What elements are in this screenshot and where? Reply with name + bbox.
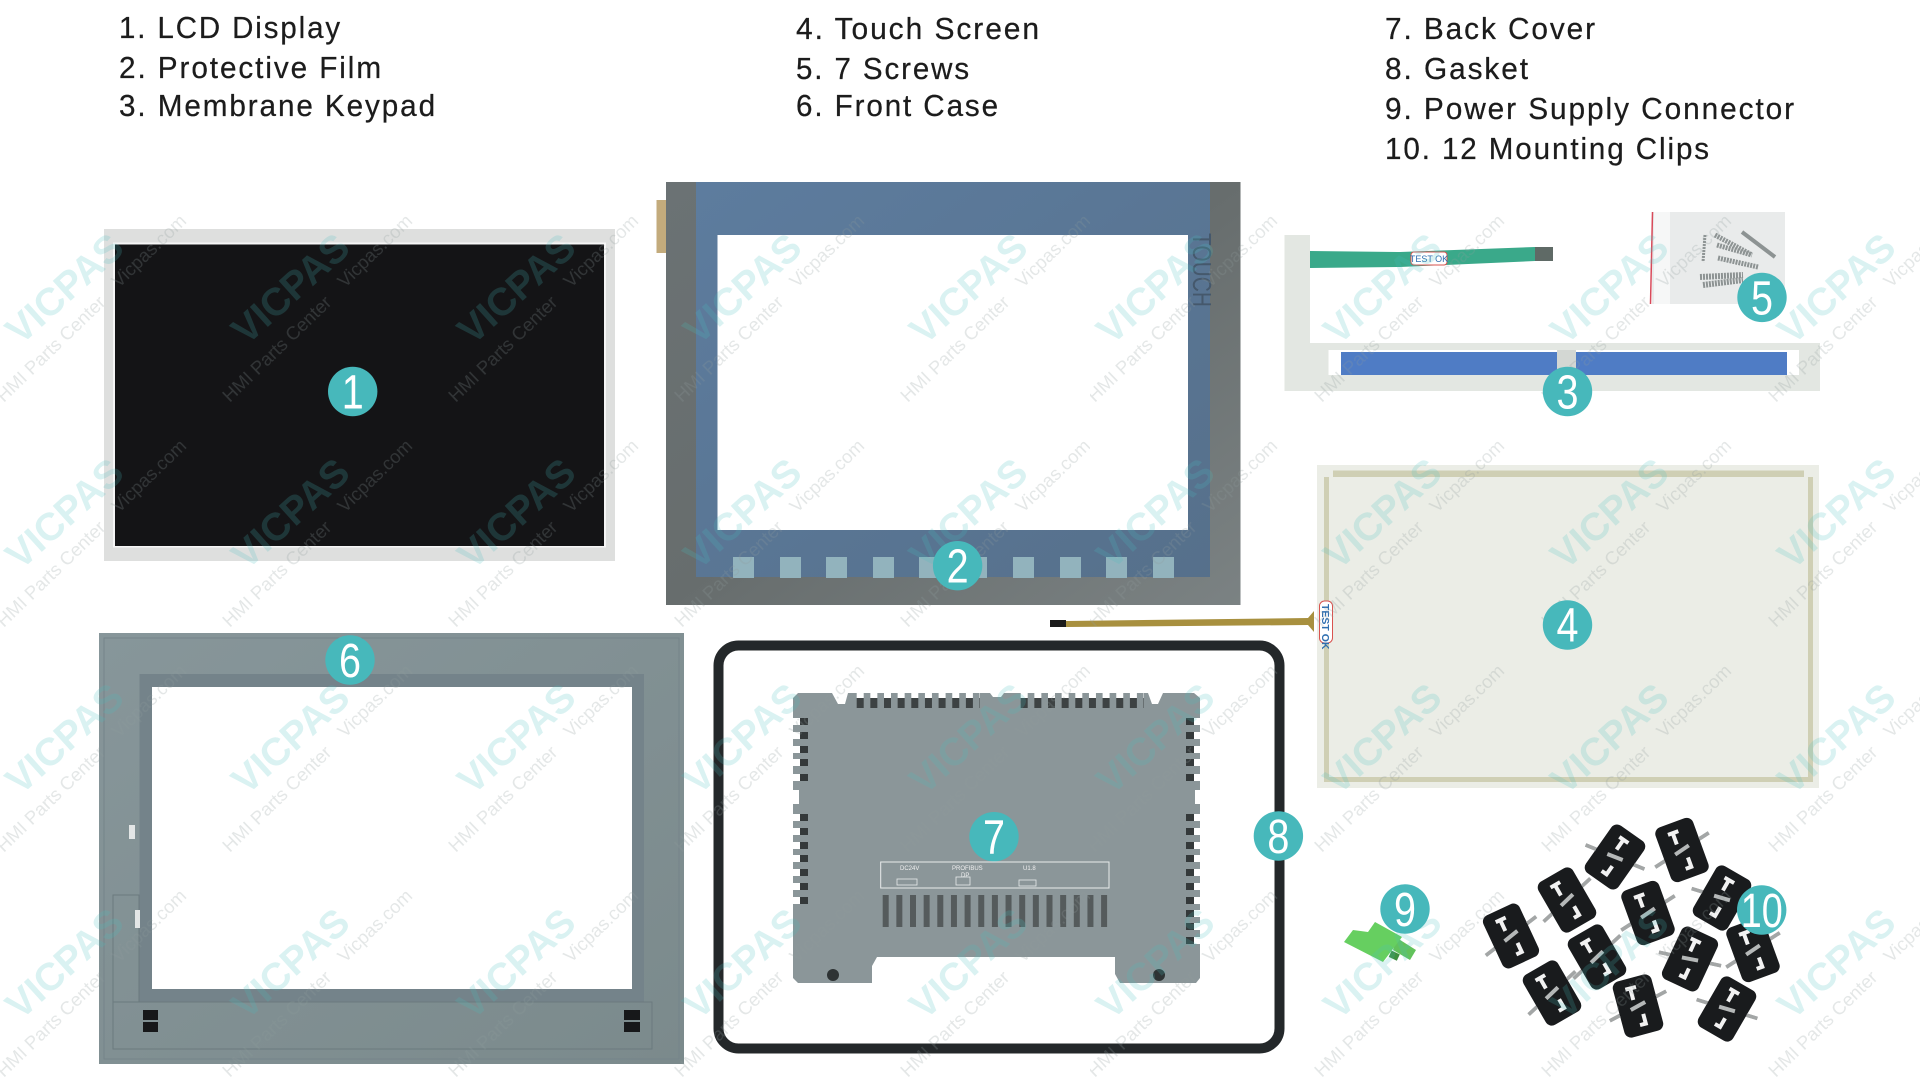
- badge 6: [325, 635, 375, 688]
- parts list: column 2: [796, 11, 1041, 123]
- parts list: column 1: 3. Membrane Keypad: [119, 88, 437, 123]
- connector label box: DP: [961, 873, 969, 879]
- badge 8: [1254, 811, 1303, 864]
- parts list: column 3: 7. Back Cover: [1385, 11, 1597, 46]
- back cover vents: [857, 696, 1144, 911]
- test ok sticker: TEST OK: [1319, 604, 1331, 650]
- badge 8: 8: [1267, 811, 1289, 864]
- part 1: LCD display: [104, 229, 615, 561]
- parts list: column 2: 6. Front Case: [796, 88, 1000, 123]
- connector label box: [881, 862, 1109, 888]
- parts list: column 3: 8. Gasket: [1385, 51, 1530, 86]
- badge 9: [1380, 884, 1430, 937]
- connector label box: DC24V: [900, 866, 919, 872]
- parts list: column 1: 1. LCD Display: [119, 10, 342, 45]
- function keys: [733, 557, 1174, 578]
- connector label box: PROFIBUS: [952, 866, 983, 872]
- part 4: touch screen: [1050, 465, 1819, 788]
- badge 9: 9: [1394, 884, 1416, 937]
- connector label box: U1.8: [1023, 866, 1036, 872]
- badge 3: [1543, 366, 1592, 420]
- touch flat cable: [1050, 611, 1314, 632]
- part 9: power supply connector: [1344, 922, 1416, 962]
- parts list: column 2: 4. Touch Screen: [796, 11, 1041, 46]
- badge 10: 10: [1741, 885, 1783, 938]
- keypad ribbon cable: [1310, 247, 1535, 268]
- badge 3: 3: [1556, 366, 1578, 420]
- parts list: column 3: [1385, 11, 1796, 166]
- part 8: gasket: [718, 646, 1280, 1048]
- film brand lettering: TOUCH: [1187, 233, 1217, 307]
- badge 4: 4: [1556, 600, 1578, 652]
- badge 2: 2: [947, 540, 969, 594]
- parts list: column 2: 5. 7 Screws: [796, 51, 971, 86]
- badge 4: [1543, 600, 1592, 652]
- parts list: column 3: 10. 12 Mounting Clips: [1385, 131, 1711, 166]
- badge 2: [933, 540, 982, 594]
- watermark layer: left: [0, 205, 1090, 1080]
- part 10: mounting clips: [1471, 812, 1792, 1050]
- screw holes: [827, 969, 1165, 981]
- part 7: back cover: [793, 693, 1201, 983]
- badge 7: 7: [983, 812, 1005, 864]
- part 6: front case: [99, 633, 684, 1064]
- parts list: column 3: 9. Power Supply Connector: [1385, 91, 1796, 126]
- case clips: [143, 1010, 640, 1032]
- badge 1: 1: [342, 366, 364, 420]
- part 2: protective film: [656, 182, 1240, 605]
- parts list: column 1: [119, 10, 437, 123]
- watermark layer: right: [1090, 205, 1920, 1080]
- part 3: membrane keypad: [1284, 235, 1820, 391]
- badge 5: 5: [1751, 272, 1773, 326]
- badge 1: [328, 366, 377, 420]
- parts list: column 1: 2. Protective Film: [119, 50, 383, 85]
- test ok sticker: TEST OK: [1410, 254, 1448, 264]
- part 5: bag of screws: [1650, 212, 1785, 304]
- badge 7: [969, 812, 1019, 864]
- badge 6: 6: [339, 635, 361, 688]
- badge 5: [1737, 272, 1787, 326]
